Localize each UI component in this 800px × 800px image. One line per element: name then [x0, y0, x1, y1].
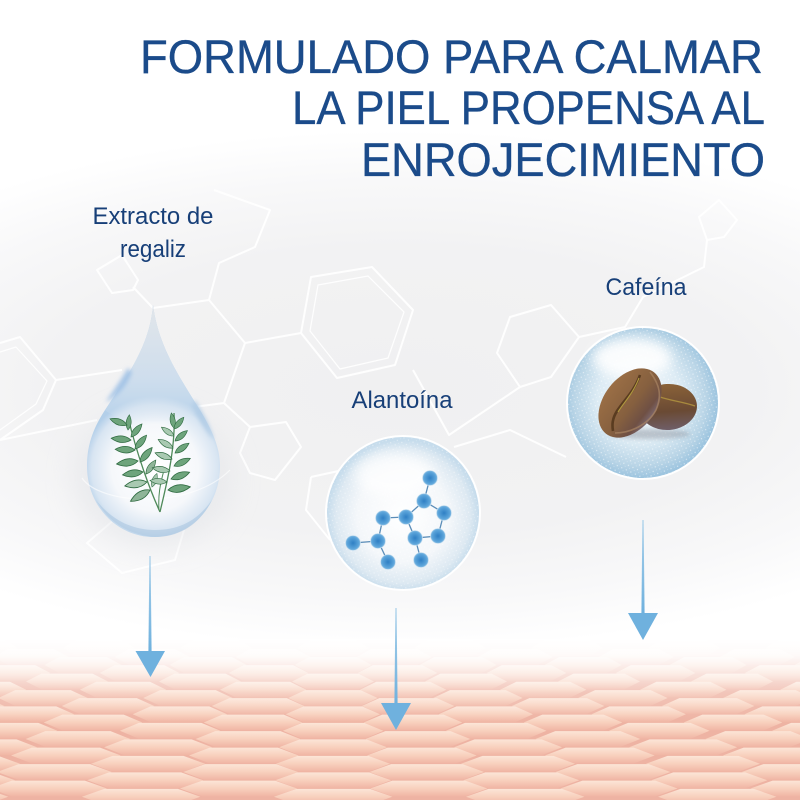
hexagon network lines — [0, 190, 737, 573]
back bean — [637, 382, 699, 432]
icon: water drop with licorice leaves — [75, 305, 231, 546]
icon: allantoin molecule sphere — [325, 435, 481, 591]
title — [140, 30, 765, 186]
label: Alantoína: Alantoína — [352, 387, 453, 414]
arrow: regaliz — [136, 556, 165, 677]
title: FORMULADO PARA CALMAR — [140, 30, 763, 83]
title: LA PIEL PROPENSA AL — [292, 81, 765, 134]
label: Extracto de regaliz: Extracto de — [92, 203, 214, 230]
skin texture — [0, 640, 800, 800]
label: Extracto de regaliz: regaliz — [120, 236, 186, 263]
label: Extracto de regaliz — [92, 203, 214, 263]
skin fade to white — [0, 639, 800, 721]
arrow: alantoína — [381, 608, 411, 730]
grey haze — [0, 120, 800, 650]
title: ENROJECIMIENTO — [361, 133, 765, 186]
arrow: cafeína — [628, 520, 658, 640]
icon: coffee beans sphere — [566, 326, 720, 480]
molecule — [346, 470, 452, 570]
label: Cafeína: Cafeína — [606, 274, 687, 301]
leaves — [109, 412, 192, 512]
front bean — [586, 356, 674, 450]
